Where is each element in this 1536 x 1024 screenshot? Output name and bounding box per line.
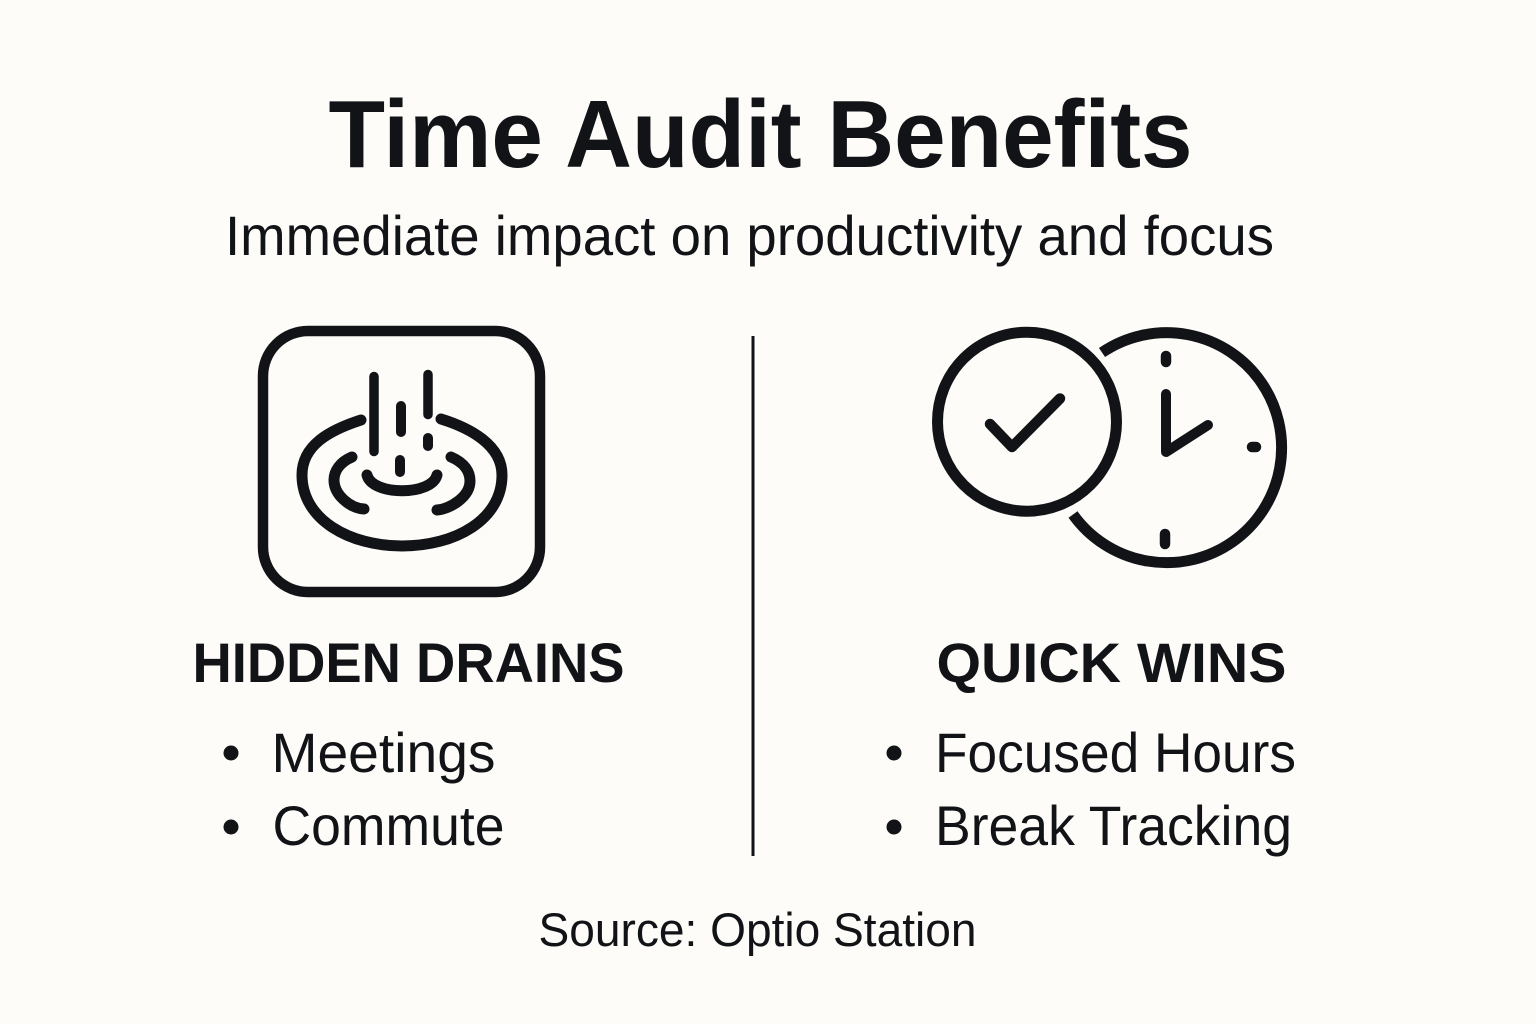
list: hidden drains items: Commute <box>272 794 504 857</box>
list: hidden drains items <box>224 721 504 857</box>
panel: hidden drains <box>192 331 624 857</box>
heading: hidden drains: HIDDEN DRAINS <box>192 631 624 694</box>
source note: Source: Optio Station <box>538 903 976 956</box>
list: quick wins items: Focused Hours <box>935 721 1296 784</box>
icon: clock and check mark <box>938 332 1282 563</box>
panel: quick wins <box>886 332 1296 857</box>
list: quick wins items <box>886 721 1296 857</box>
title: Time Audit Benefits <box>328 81 1192 188</box>
divider <box>752 336 754 856</box>
icon: draining water in rounded square <box>263 331 540 592</box>
subtitle: Immediate impact on productivity and focus <box>225 204 1274 267</box>
list: hidden drains items: Meetings <box>272 721 496 784</box>
list: quick wins items: Break Tracking <box>935 794 1292 857</box>
heading: quick wins: QUICK WINS <box>936 631 1286 694</box>
